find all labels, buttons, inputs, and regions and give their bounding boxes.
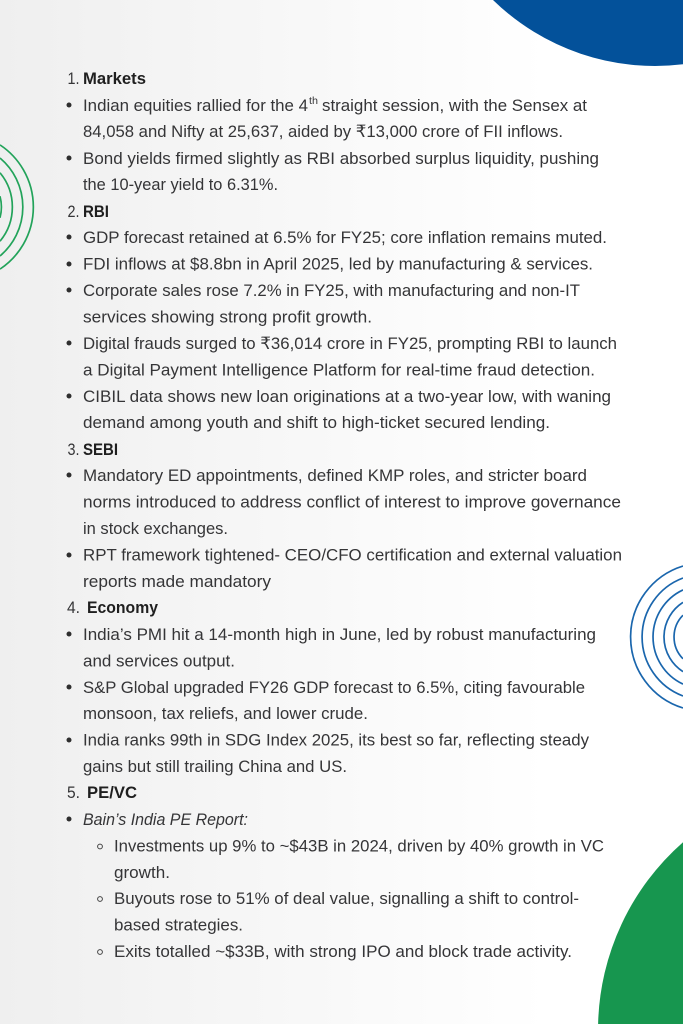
decorative blue circle, top right: [493, 0, 683, 66]
bullet: equities: Indian equities rallied for the 4: [83, 96, 308, 115]
green concentric rings, left edge: [0, 145, 33, 269]
bullet: RPT framework: [66, 546, 622, 591]
bullet: bond yields: [66, 149, 599, 194]
heading: SEBI: [68, 440, 118, 459]
bullet: RPT framework: RPT framework tightened- CEO/CFO certification and external valuation: [83, 546, 622, 565]
bullet: S&P upgrade: S&P Global upgraded FY26 GDP forecast to 6.5%, citing favourable: [83, 678, 585, 697]
bullet: equities: [66, 96, 587, 141]
bullet: SDG index: India ranks 99th in SDG Index 2025, its best so far, reflecting steady: [83, 731, 589, 750]
bullet: digital frauds: Digital frauds surged to ₹36,014 crore in FY25, prompting RBI to launch: [83, 334, 617, 353]
bullet: ED appointments: norms introduced to address conflict of interest to improve governance: [83, 493, 621, 512]
bullet: PMI: [66, 625, 596, 671]
heading: PE/VC: 5.: [67, 783, 80, 802]
heading: RBI: [68, 202, 109, 221]
bullet: ED appointments: [66, 466, 621, 538]
section 3: SEBI: [66, 440, 622, 591]
heading: Markets: 1.: [68, 69, 80, 88]
bullet: RPT framework: reports made mandatory: [83, 572, 272, 591]
heading: Economy: 4.: [67, 598, 80, 617]
heading: Economy: Economy: [87, 598, 158, 617]
bullet: GDP forecast: GDP forecast retained at 6.5% for FY25; core inflation remains muted.: [83, 228, 607, 247]
heading: PE/VC: PE/VC: [87, 783, 137, 802]
sub-bullet: investments: Investments up 9% to ~$43B in 2024, driven by 40% growth in VC: [114, 837, 604, 856]
bullet: SDG index: [66, 731, 589, 776]
bullet: corporate sales: Corporate sales rose 7.2% in FY25, with manufacturing and non-IT: [83, 281, 580, 300]
blue concentric rings, right edge: [631, 566, 683, 708]
bullet: equities: th: [309, 96, 318, 107]
bullet: CIBIL data: CIBIL data shows new loan originations at a two-year low, with waning: [83, 387, 611, 406]
bullet: S&P upgrade: monsoon, tax reliefs, and lower crude.: [83, 704, 368, 723]
heading: RBI: 2.: [68, 202, 80, 221]
sub-bullet: investments: [98, 837, 604, 882]
section 4: Economy: [66, 598, 596, 776]
bullet: PMI: India’s PMI hit a 14-month high in June, led by robust manufacturing: [83, 625, 596, 644]
bullet: digital frauds: [66, 334, 617, 380]
bullet: ED appointments: Mandatory ED appointments, defined KMP roles, and stricter board: [83, 466, 587, 485]
bullet: ED appointments: in stock exchanges.: [83, 519, 228, 538]
bullet: corporate sales: [66, 281, 580, 327]
heading: RBI: RBI: [83, 202, 109, 221]
section 5: PE/VC: [66, 783, 604, 961]
heading: Markets: Markets: [83, 69, 146, 88]
bullet: Bain report: Bain’s India PE Report:: [83, 810, 248, 829]
sub-bullet: buyouts: Buyouts rose to 51% of deal value, signalling a shift to control-: [114, 889, 579, 908]
heading: SEBI: SEBI: [83, 440, 118, 459]
bullet: bond yields: the 10-year yield to 6.31%.: [83, 175, 278, 194]
bullet: equities: 84,058 and Nifty at 25,637, aided by ₹13,000 crore of FII inflows.: [83, 122, 563, 141]
section 2: RBI: [66, 202, 617, 432]
bullet: FDI inflows: FDI inflows at $8.8bn in April 2025, led by manufacturing & services.: [83, 254, 593, 274]
bullet: bond yields: Bond yields firmed slightly as RBI absorbed surplus liquidity, pushing: [83, 149, 599, 168]
bullet: CIBIL data: [66, 387, 611, 432]
bullet: corporate sales: services showing strong profit growth.: [83, 308, 372, 327]
sub-bullet: buyouts: based strategies.: [114, 916, 243, 935]
bullet: CIBIL data: demand among youth and shift to high-ticket secured lending.: [83, 413, 550, 432]
bullet: S&P upgrade: [66, 678, 585, 723]
sub-bullet: investments: growth.: [114, 863, 170, 882]
sub-bullet: exits: Exits totalled ~$33B, with strong IPO and block trade activity.: [114, 942, 572, 961]
bullet: PMI: and services output.: [83, 652, 235, 671]
heading: SEBI: 3.: [68, 440, 80, 459]
sub-bullet: buyouts: [98, 889, 579, 935]
decorative green circle, bottom right: [598, 842, 683, 1024]
bullet: digital frauds: a Digital Payment Intelligence Platform for real-time fraud detection.: [83, 361, 595, 380]
bullet: SDG index: gains but still trailing China and US.: [83, 757, 347, 776]
bullet: equities: straight session, with the Sensex at: [322, 96, 587, 115]
section 1: Markets: [66, 69, 599, 194]
